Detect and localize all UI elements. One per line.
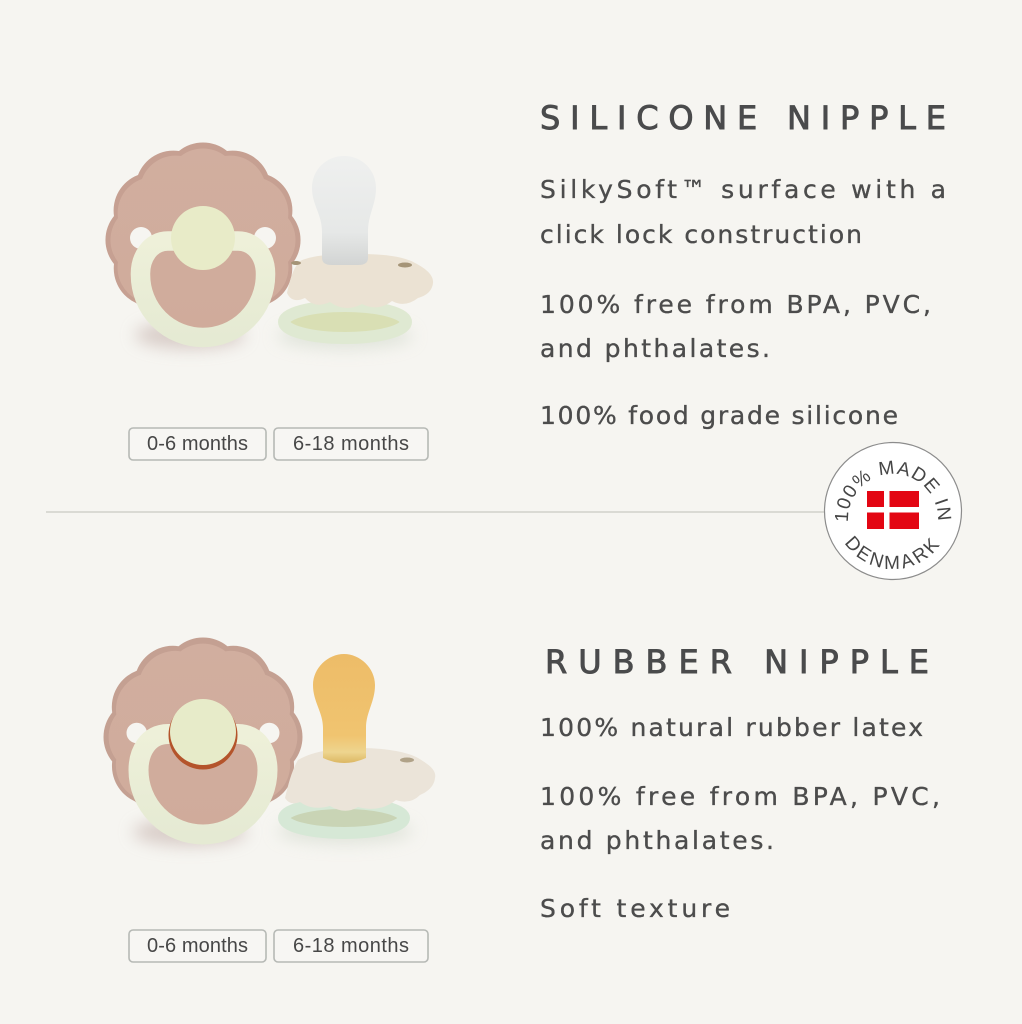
- badge: 100% made in Denmark: DENMARK: [845, 536, 940, 569]
- label 6-18 months: 6-18 months: [293, 935, 409, 957]
- glow ring handle: [138, 734, 268, 834]
- lower ring: [284, 305, 406, 338]
- text: silicone features: click lock construction: [540, 220, 862, 249]
- button: [170, 699, 236, 765]
- label 0-6 months: [129, 428, 266, 460]
- label 0-6 months: 0-6 months: [147, 935, 248, 957]
- rust collar: [168, 700, 238, 770]
- label 6-18 months: [274, 930, 428, 962]
- text: silicone features: and phthalates.: [540, 334, 770, 363]
- age labels: rubber: [129, 930, 428, 962]
- label 6-18 months: 6-18 months: [293, 433, 409, 455]
- button: [171, 206, 235, 270]
- flower shield: [104, 638, 302, 831]
- divider: [46, 511, 825, 513]
- text: rubber features: Soft texture: [540, 894, 730, 923]
- flower shield: [105, 142, 301, 332]
- text: rubber features: 100% natural rubber latex: [540, 713, 923, 742]
- text: silicone features: 100% food grade silicone: [540, 401, 898, 430]
- label 0-6 months: [129, 930, 266, 962]
- lower ring: [284, 800, 404, 833]
- glow ring handle: [140, 241, 266, 338]
- text: rubber features: [540, 713, 940, 923]
- rubber nipple bulb: [313, 654, 375, 763]
- text: rubber features: and phthalates.: [540, 826, 774, 855]
- badge: 100% made in Denmark: 100% MADE IN: [835, 460, 952, 521]
- text: silicone features: 100% free from BPA, PVC,: [540, 290, 931, 319]
- Danish flag: [867, 491, 919, 529]
- label 0-6 months: 0-6 months: [147, 433, 248, 455]
- text: silicone features: [540, 175, 946, 430]
- pacifier: silicone nipple: [105, 142, 433, 349]
- silicone nipple bulb: [312, 156, 376, 265]
- heading: rubber nipple: RUBBER NIPPLE: [545, 643, 929, 681]
- cream shield: [285, 748, 435, 811]
- badge: 100% made in Denmark: [824, 442, 962, 580]
- cream shield: [287, 254, 433, 308]
- label 6-18 months: [274, 428, 428, 460]
- text: rubber features: 100% free from BPA, PVC,: [540, 782, 940, 811]
- text: silicone features: SilkySoft™ surface with a: [540, 175, 946, 204]
- pacifier: rubber nipple: [104, 638, 435, 846]
- age labels: silicone: [129, 428, 428, 460]
- heading: silicone nipple: SILICONE NIPPLE: [540, 99, 946, 137]
